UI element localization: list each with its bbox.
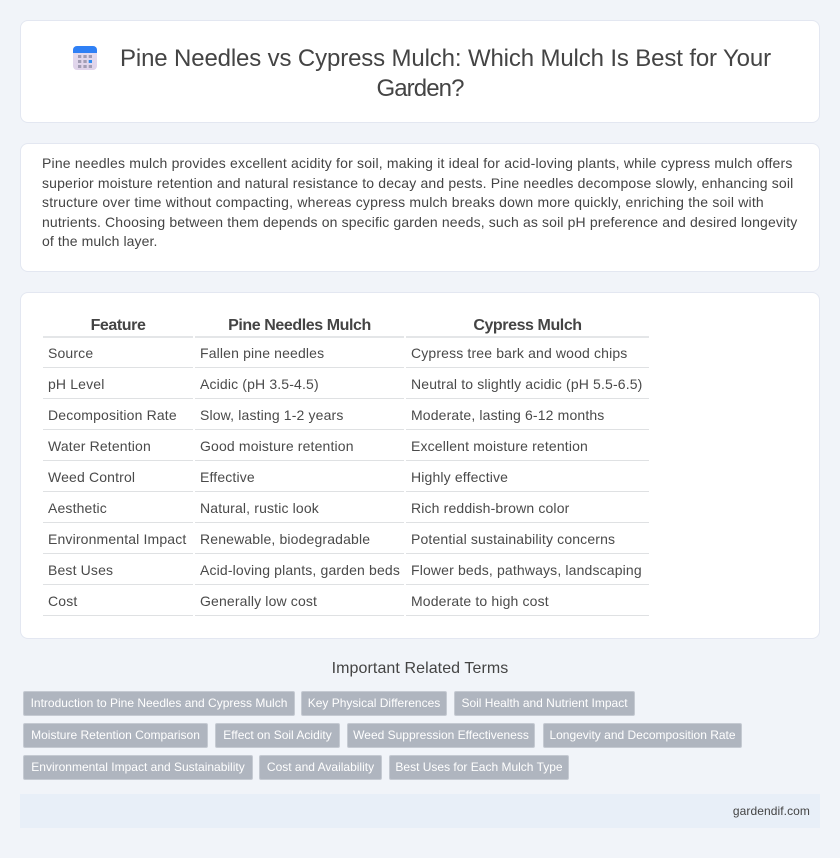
table header: Pine Needles Mulch [228, 317, 371, 334]
row: weed control [48, 469, 508, 485]
tag [23, 755, 253, 780]
tag [454, 691, 635, 716]
table header [91, 317, 582, 334]
row: source: Source [48, 345, 93, 361]
row: aesthetic: Rich reddish-brown color [411, 500, 569, 516]
row: aesthetic: Aesthetic [48, 500, 107, 516]
row: source: Cypress tree bark and wood chips [411, 345, 627, 361]
row: cost: Generally low cost [200, 593, 317, 609]
tag: Weed Suppression Effectiveness [353, 728, 529, 742]
row: weed control: Highly effective [411, 469, 508, 485]
row: water retention: Water Retention [48, 438, 151, 454]
row: aesthetic: Natural, rustic look [200, 500, 319, 516]
tag: Cost and Availability [267, 760, 374, 774]
row: weed control: Weed Control [48, 469, 135, 485]
row: weed control: Effective [200, 469, 255, 485]
row: water retention [48, 438, 588, 454]
tag: Moisture Retention Comparison [31, 728, 200, 742]
row: decomposition rate: Moderate, lasting 6-12 months [411, 407, 604, 423]
row: environmental impact: Renewable, biodegradable [200, 531, 370, 547]
panel: summary [20, 143, 820, 272]
tag: Soil Health and Nutrient Impact [461, 696, 628, 710]
row: ph level: pH Level [48, 376, 104, 392]
row: cost: Moderate to high cost [411, 593, 549, 609]
panel: comparison table [20, 292, 820, 639]
table [43, 317, 649, 616]
summary text: superior moisture retention and natural resistance to decay and pests. Pine needles decompose slowly, enhancing soil [42, 175, 793, 191]
summary text: of the mulch layer. [42, 233, 158, 249]
tag: Longevity and Decomposition Rate [549, 728, 736, 742]
tag: Effect on Soil Acidity [223, 728, 332, 742]
related terms heading: Important Related Terms [332, 660, 508, 677]
tag [259, 755, 382, 780]
title: Pine Needles vs Cypress Mulch: Which Mulch Is Best for Your [120, 45, 771, 72]
footer bar [20, 794, 820, 828]
row: best uses [48, 562, 642, 578]
header panel [20, 20, 820, 123]
icon: calendar [73, 46, 97, 70]
tag [389, 755, 569, 780]
tag [23, 723, 208, 748]
tag [301, 691, 447, 716]
row: best uses: Flower beds, pathways, landscaping [411, 562, 642, 578]
footer source: gardendif.com [733, 804, 810, 818]
related term tags [23, 691, 742, 780]
title: Garden? [376, 75, 464, 102]
summary text: nutrients. Choosing between them depends on specific garden needs, such as soil pH preference and desired longevity [42, 214, 797, 230]
row: decomposition rate: Slow, lasting 1-2 years [200, 407, 344, 423]
row: decomposition rate: Decomposition Rate [48, 407, 177, 423]
tag: Environmental Impact and Sustainability [31, 760, 245, 774]
tag [215, 723, 340, 748]
row: aesthetic [48, 500, 570, 516]
row: best uses: Acid-loving plants, garden beds [200, 562, 400, 578]
tag [543, 723, 742, 748]
row: environmental impact: Environmental Impact [48, 531, 186, 547]
summary text [42, 155, 798, 249]
tag [23, 691, 295, 716]
row: ph level [48, 376, 642, 392]
row: decomposition rate [48, 407, 604, 423]
row: best uses: Best Uses [48, 562, 113, 578]
row: source: Fallen pine needles [200, 345, 324, 361]
row: ph level: Neutral to slightly acidic (pH 5.5-6.5) [411, 376, 642, 392]
row: water retention: Excellent moisture retention [411, 438, 588, 454]
summary text: structure over time without compacting, whereas cypress mulch breaks down more quickly, enriching the soil with [42, 194, 764, 210]
table header: Feature [91, 317, 145, 334]
summary text: Pine needles mulch provides excellent acidity for soil, making it ideal for acid-loving plants, while cypress mulch offers [42, 155, 793, 171]
row: cost: Cost [48, 593, 77, 609]
row: environmental impact [48, 531, 615, 547]
title [120, 45, 771, 102]
tag: Best Uses for Each Mulch Type [395, 760, 563, 774]
tag: Key Physical Differences [308, 696, 440, 710]
row: water retention: Good moisture retention [200, 438, 354, 454]
row: cost [48, 593, 549, 609]
tag [347, 723, 535, 748]
row: environmental impact: Potential sustainability concerns [411, 531, 615, 547]
row: ph level: Acidic (pH 3.5-4.5) [200, 376, 319, 392]
tag: Introduction to Pine Needles and Cypress Mulch [31, 696, 287, 710]
row: source [48, 345, 627, 361]
table header: Cypress Mulch [473, 317, 582, 334]
